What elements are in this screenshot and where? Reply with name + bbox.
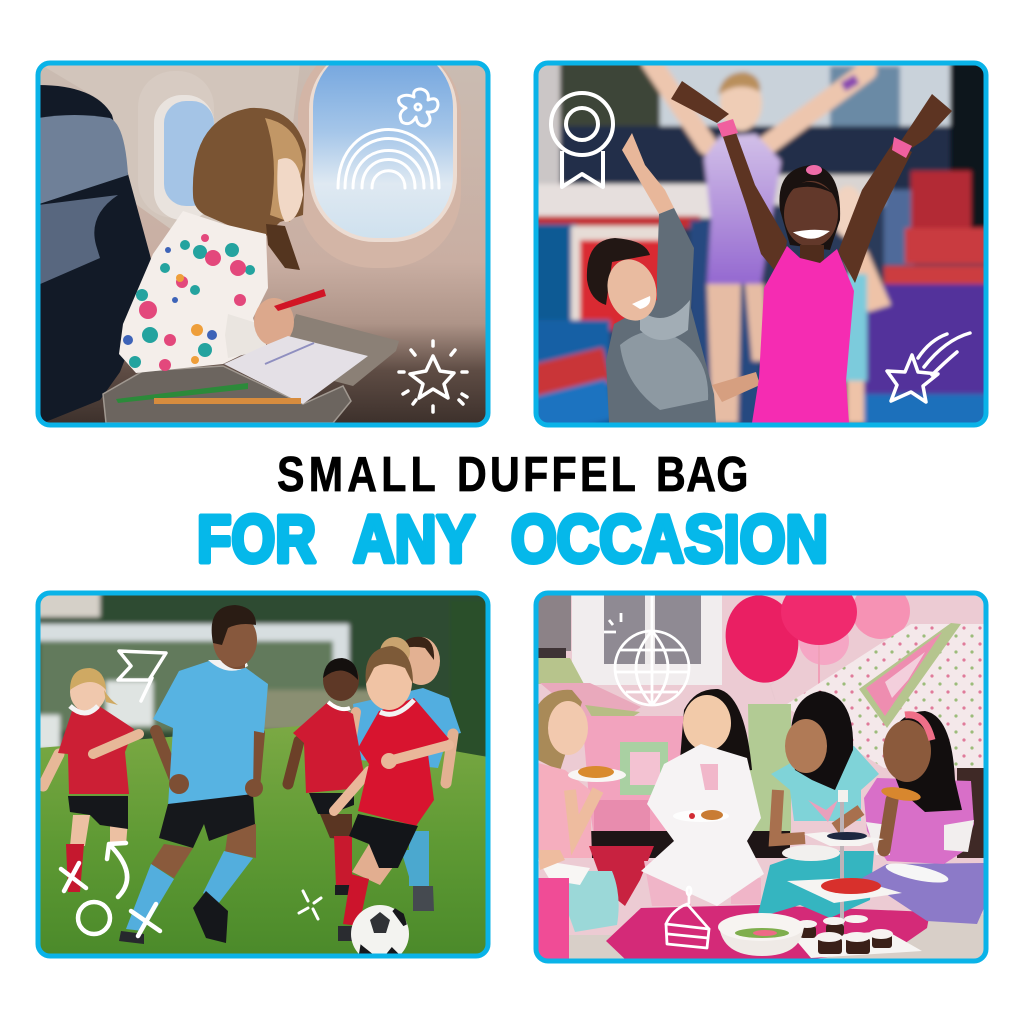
girl in robe: [641, 689, 764, 906]
icon: rainbow: [338, 130, 439, 188]
pillows left: [538, 658, 691, 838]
airplane seat: [36, 85, 156, 425]
grass: [38, 726, 488, 956]
sleeve cuff: [225, 314, 266, 358]
blurred field background: [40, 596, 486, 756]
dark floor band: [590, 831, 790, 858]
hair curl: [266, 224, 300, 270]
girl left: [538, 690, 654, 932]
soccer ball: [351, 905, 409, 954]
frame: soccer: [38, 593, 488, 956]
girl left: [43, 668, 139, 892]
floral hoodie: [119, 211, 268, 373]
green pencil: [116, 383, 248, 403]
frame: airplane: [38, 63, 488, 425]
polka dot bedding: [784, 624, 986, 768]
heading: for any occasion: FOR: [197, 502, 316, 577]
background gymnast: [651, 62, 867, 423]
blue boy back: [349, 637, 461, 911]
icon: award ribbon: [551, 93, 613, 187]
heading: for any occasion: OCCASION: [511, 502, 828, 577]
balloons: [726, 596, 910, 684]
boy in red: [334, 646, 449, 941]
heading: small duffel bag: [277, 447, 748, 502]
icon: sparkling star: [399, 341, 467, 412]
cabin window large: [298, 66, 461, 268]
red pen: [274, 289, 326, 311]
floor: [536, 915, 986, 961]
girl hand: [254, 298, 294, 346]
girl in teal: [757, 691, 879, 918]
tray table front: [103, 366, 351, 423]
pink rug: [606, 905, 930, 961]
heading: small duffel bag: BAG: [656, 447, 748, 502]
frame: party: [536, 593, 986, 961]
third gymnast: [832, 186, 891, 423]
tray table back: [288, 314, 399, 386]
panel: gymnastics photo: [527, 60, 995, 437]
pink gift box: [538, 878, 569, 961]
icon: shooting star: [887, 333, 970, 402]
girl in red back: [288, 658, 364, 895]
girl face: [277, 158, 303, 222]
girl hair: [193, 108, 306, 240]
blurred gym background: [527, 60, 995, 437]
bed base: [957, 768, 986, 858]
cabin window small: [154, 95, 214, 220]
icon: play diagram: [61, 843, 160, 936]
heading: for any occasion: [197, 502, 828, 577]
gymnast in pink: [671, 81, 952, 423]
panel: airplane photo: [36, 40, 488, 425]
coach: [587, 133, 760, 423]
icon: cake slice: [666, 887, 709, 948]
panel: party photo: [536, 579, 986, 961]
boy in blue: [119, 605, 268, 944]
frame: gymnastics: [536, 63, 986, 425]
heading: small duffel bag: SMALL: [277, 447, 436, 502]
heading: for any occasion: ANY: [353, 502, 475, 577]
panel: soccer photo: [40, 596, 486, 954]
candy bowl: [718, 913, 804, 956]
green pillow centre: [748, 704, 791, 838]
icon: flower: [399, 89, 438, 126]
icon: disco ball: [604, 596, 689, 705]
food stand: [782, 790, 922, 958]
paper notebook: [224, 336, 368, 404]
icon: sparkle: [299, 891, 321, 919]
orange pencil: [154, 398, 301, 404]
curtain and window: [536, 593, 722, 685]
pen scribble: [265, 343, 314, 364]
girl in purple: [862, 711, 984, 924]
icon: flag: [118, 651, 166, 701]
quilted pillow right: [859, 623, 961, 728]
heading: small duffel bag: DUFFEL: [457, 447, 636, 502]
